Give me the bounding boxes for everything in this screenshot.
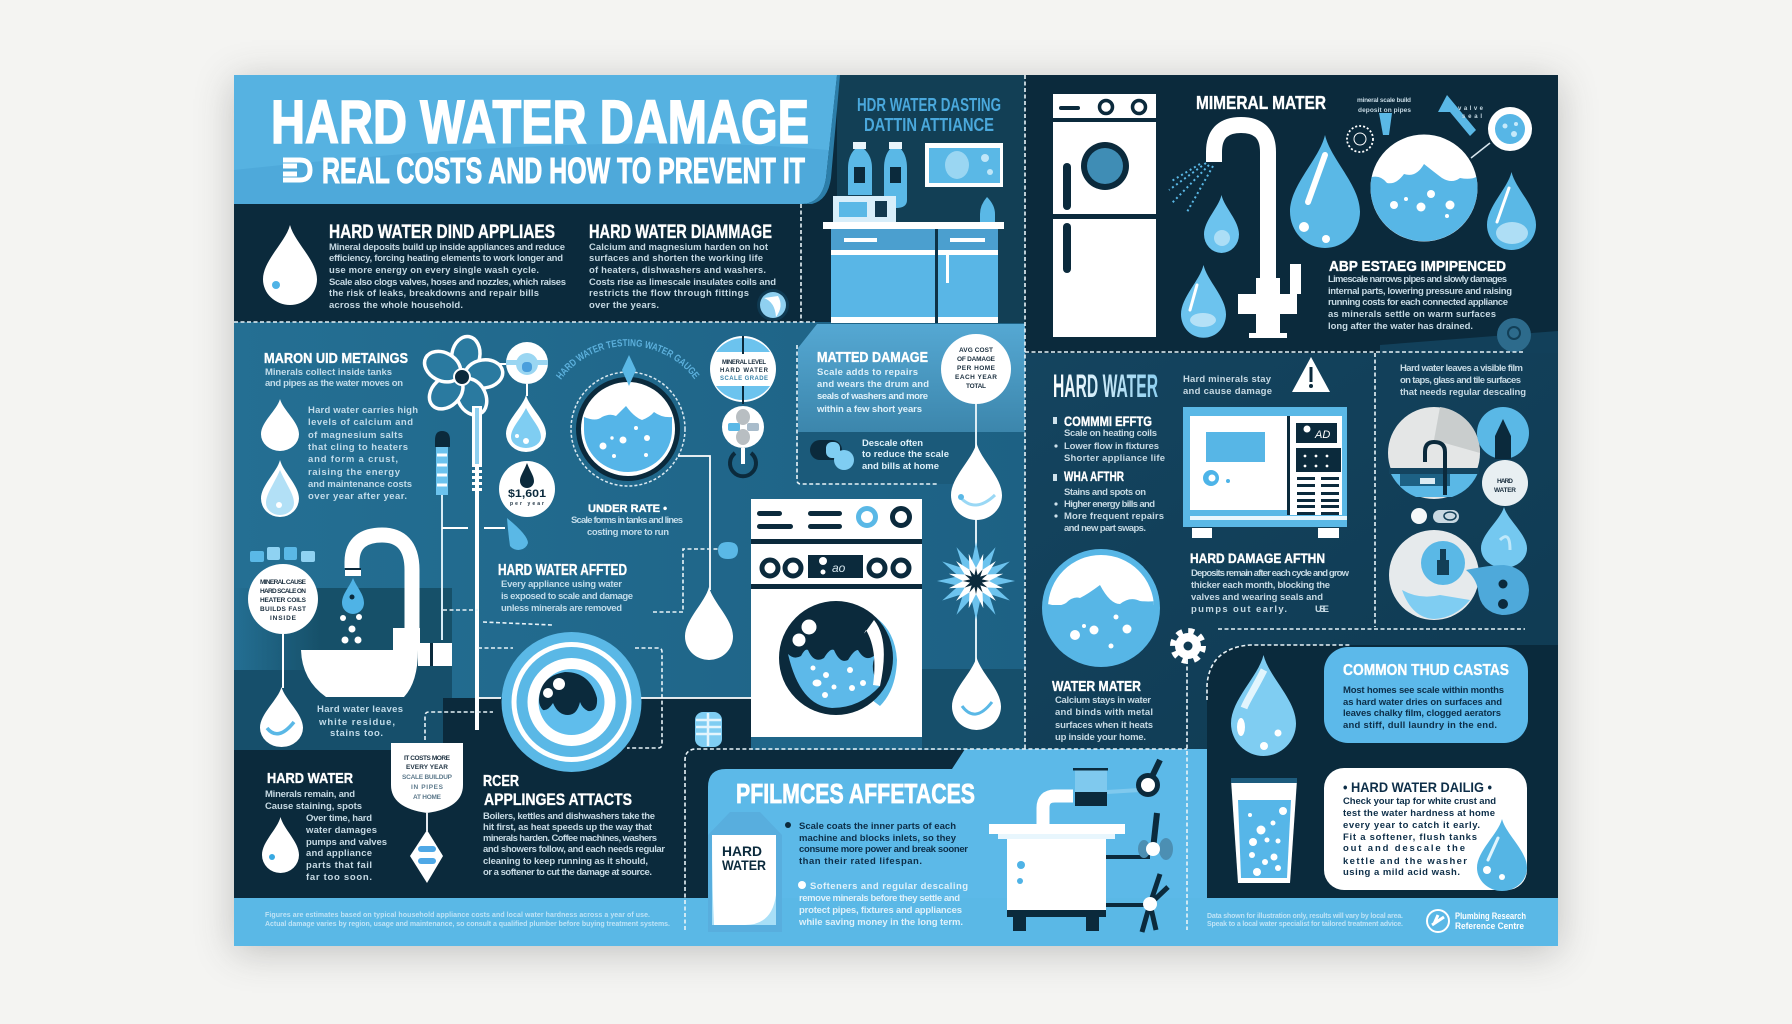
heading: appliances attacks: APPLINGES ATTACTS — [484, 790, 632, 809]
text block: top right notes — [1400, 363, 1526, 398]
text block: lower notes: water damages — [305, 825, 377, 836]
callout: hard water daily — [1324, 768, 1527, 890]
icon: band circle: SCALE GRADE — [720, 376, 768, 382]
icon: tap drop with connector — [653, 456, 738, 660]
panel: sky appliances section — [708, 760, 1173, 932]
icon: shower tool: seal — [1462, 114, 1482, 120]
text block: appliance effects: running costs for each connected appliance — [1328, 297, 1508, 308]
icon: text badge: HARD — [1497, 478, 1513, 485]
text block: appliances attacks: minerals harden. Coffee machines, washers — [483, 833, 657, 844]
icon: big drop — [1290, 135, 1360, 248]
text block: appliance effects: long after the water has drained. — [1328, 321, 1473, 332]
text block: basin note: Hard water leaves — [317, 704, 403, 715]
icon: white text circle: MINERAL CAUSE — [260, 579, 307, 586]
list: common effects: Stains and spots on — [1064, 487, 1146, 498]
icon: white info circle — [941, 334, 1011, 404]
callout: hard water daily: test the water hardness at home — [1343, 808, 1495, 819]
text block: state note — [571, 503, 683, 538]
text block: appliances: use more energy on every single wash cycle. — [329, 265, 539, 276]
icon: text badge: WATER — [1494, 487, 1516, 494]
list: common effects: Higher energy bills and — [1064, 499, 1155, 510]
text block: water: surfaces when it heats — [1055, 720, 1153, 731]
heading: cabinet column: DATTIN ATTIANCE — [864, 115, 994, 135]
text block: pale bullet: while saving money in the long term. — [798, 917, 963, 928]
icon: band circle — [710, 336, 776, 404]
text block: dark bullet: machine and blocks inlets, so they — [799, 833, 957, 844]
text block: appliances attacks: or a softener to cut the damage at source. — [483, 867, 652, 878]
panel: sky appliance section — [708, 749, 1207, 898]
text block: drop notes: Hard water carries high — [308, 405, 418, 416]
text block: damage: Costs rise as limescale insulates coils and — [589, 277, 776, 288]
icon: stacked cubes — [250, 547, 315, 562]
icon: sink faucet — [301, 535, 452, 697]
icon: white text circle: HARD SCALE ON — [260, 588, 306, 595]
icon: warning triangle — [1292, 357, 1330, 392]
text block: basin note: white residue, — [318, 717, 395, 728]
icon: glass of water — [1231, 778, 1297, 883]
text block: appliances: Mineral deposits build up inside appliances and reduce — [329, 242, 565, 253]
icon: water gauge — [571, 355, 685, 486]
panel: cabinet column — [837, 75, 1025, 323]
icon: shimmering drop — [1481, 507, 1527, 568]
icon: small ring circle — [1471, 107, 1532, 158]
icon: white drop pair — [261, 399, 299, 517]
panel: tips column — [1231, 647, 1528, 891]
icon: water circle large — [1042, 549, 1160, 670]
text block: appliances: efficiency, forcing heating elements to work longer and — [329, 253, 563, 264]
heading: appliances: HARD WATER DIND APPLIAES — [329, 222, 555, 243]
text block: basin note — [317, 704, 403, 739]
icon: starburst — [937, 542, 1015, 620]
icon: small blue drop — [507, 518, 528, 550]
text block: water: Calcium stays in water — [1055, 695, 1151, 706]
icon: shield note — [391, 743, 463, 813]
icon: lower drop — [262, 817, 299, 873]
icon: cabinet — [823, 222, 1004, 323]
text block: state note: UNDER RATE • — [588, 503, 667, 515]
text block: appliances attacks: cleaning to keep running as it should, — [483, 856, 648, 867]
icon: stem with drops — [951, 404, 1002, 730]
text block: appliances attacks: hit first, as heat speeds up the way that — [483, 822, 653, 833]
icon: shield note: SCALE BUILDUP — [402, 774, 453, 781]
icon: price circle — [499, 461, 555, 517]
icon: thin probe — [435, 431, 505, 640]
text block: affected: Every appliance using water — [501, 579, 622, 590]
callout: hard water daily: using a mild acid wash. — [1343, 867, 1460, 878]
text block: matted damage: within a few short years — [816, 404, 922, 415]
icon: small bottle — [980, 197, 995, 222]
icon: drop dot — [272, 281, 280, 289]
text block: drop notes: and maintenance costs — [308, 479, 412, 490]
text block: dark bullet: than their rated lifespan. — [799, 856, 922, 867]
callout: hard water daily: Check your tap for white crust and — [1343, 796, 1496, 807]
panel: sink backdrop band — [234, 588, 452, 670]
text block: damage after: valves and wearing seals and — [1191, 592, 1323, 603]
icon: washing machine — [751, 499, 922, 737]
icon: peg and note — [1357, 97, 1411, 135]
panel: bottom left content — [262, 743, 665, 883]
text block: metrics: and pipes as the water moves on — [265, 378, 403, 389]
icon: light drop — [1231, 655, 1296, 756]
text block: appliances attacks: Boilers, kettles and dishwashers take the — [483, 811, 655, 822]
icon: striped capsule — [695, 712, 722, 747]
text block: drop notes: raising the energy — [308, 467, 401, 478]
text block: pale bullet — [798, 881, 968, 928]
list: common effects — [1053, 413, 1165, 534]
icon: dashed seal — [1347, 126, 1373, 152]
text block: damage after: USE — [1315, 604, 1329, 615]
icon: lock circle — [497, 342, 548, 396]
header banner — [234, 75, 840, 204]
icon: picture frame — [925, 143, 1003, 187]
text block: lower intro: Minerals remain, and — [265, 789, 355, 800]
icon: microwave — [833, 196, 896, 223]
text block: footer middle: Data shown for illustration only, results will vary by local area. — [1207, 913, 1403, 920]
text block: drop notes: over year after year. — [308, 491, 407, 502]
text block: matted damage: Scale adds to repairs — [817, 367, 918, 378]
icon: peg and note: deposit on pipes — [1358, 107, 1411, 114]
panel: top right corner shade — [1380, 331, 1558, 353]
text block: damage: restricts the flow through fittings — [589, 288, 749, 299]
icon: spray — [1169, 163, 1213, 212]
callout: common causes: as hard water dries on surfaces and — [1343, 697, 1502, 708]
icon: fan circle — [722, 406, 764, 448]
text block: dark bullet: consume more power and break sooner — [799, 844, 968, 855]
icon: lower drop — [1181, 265, 1226, 338]
icon: faucet — [1214, 125, 1301, 338]
text block: footer middle — [1207, 913, 1403, 928]
heading: appliances attacks — [483, 773, 632, 809]
list: common effects: COMMMI EFFTG — [1064, 413, 1152, 429]
text block: affected — [501, 579, 633, 614]
text block: appliances: the risk of leaks, breakdowns and repair bills — [329, 288, 539, 299]
text block: top right notes: Hard water leaves a visible film — [1400, 363, 1523, 374]
panel: sky footer — [234, 898, 1558, 946]
icon: footer logo — [1427, 910, 1449, 932]
heading: water water: WATER MATER — [1052, 678, 1141, 695]
text block: damage: over the years. — [589, 300, 659, 311]
text block: drop notes: levels of calcium and — [308, 417, 413, 428]
icon: band circle: MINERAL LEVEL — [722, 360, 766, 366]
heading: appliance effects: ABP ESTAEG IMPIPENCED — [1329, 258, 1506, 275]
panel: mineral water top right — [1053, 93, 1536, 352]
panel: kitchen cabinet illustration — [823, 95, 1004, 323]
icon: stem and drop — [260, 634, 303, 747]
icon: shower tool — [1438, 95, 1484, 136]
icon: bottles — [848, 142, 907, 208]
icon: band circle: HARD WATER — [720, 368, 769, 374]
text block: footer left: Figures are estimates based on typical household appliance costs and local water hardness across a year of use. — [265, 912, 650, 919]
list: common effects: and new part swaps. — [1064, 523, 1146, 534]
heading: main metrics: MARON UID METAINGS — [264, 350, 408, 367]
text block: damage after: thicker each month, blocking the — [1191, 580, 1330, 591]
text block: dark bullet — [785, 821, 968, 867]
text block: affected: unless minerals are removed — [501, 603, 622, 614]
icon: small drop — [1204, 195, 1239, 253]
callout: common causes: COMMON THUD CASTAS — [1343, 662, 1509, 679]
text block: footer brand: Plumbing Research — [1455, 911, 1526, 922]
icon: white info circle: TOTAL — [966, 383, 986, 390]
text block: pale bullet: remove minerals before they settle and — [799, 893, 960, 904]
text block: matted damage: and wears the drum and — [817, 379, 929, 390]
text block: metrics — [265, 367, 403, 389]
panel: matted damage card — [798, 324, 1025, 484]
text block: lower notes: far too soon. — [306, 872, 372, 883]
text block: damage after: Deposits remain after each cycle and grow — [1191, 568, 1350, 579]
text block: footer middle: Speak to a local water specialist for tailored treatment advice. — [1207, 921, 1403, 928]
text block: damage — [589, 242, 776, 311]
text block: state note: costing more to run — [587, 527, 669, 538]
heading: hard water lower: HARD WATER — [267, 770, 353, 787]
icon: blue drop — [1477, 819, 1527, 891]
icon: subtitle badge — [283, 160, 310, 180]
icon: peg and note: mineral scale build — [1357, 97, 1411, 104]
text block: damage after: pumps out early. — [1191, 604, 1287, 615]
text block: drop notes: and form a crust, — [308, 454, 398, 465]
text block: lower notes: pumps and valves — [306, 837, 387, 848]
text block: appliances: Scale also clogs valves, hoses and nozzles, which raises — [329, 277, 566, 288]
text block: appliance effects: internal parts, lowering pressure and raising — [1328, 286, 1512, 297]
panel: dark tips panel — [1207, 645, 1558, 898]
text block: lower notes — [305, 813, 387, 883]
callout: common causes: Most homes see scale within months — [1343, 685, 1504, 696]
text block: lower intro: Cause staining, spots — [265, 801, 362, 812]
text block: pill note: and bills at home — [862, 461, 939, 472]
text block: water — [1055, 695, 1153, 743]
text block: metrics: Minerals collect inside tanks — [265, 367, 392, 378]
icon: eye ring — [502, 632, 642, 772]
icon: shower tool: valve — [1458, 106, 1484, 112]
panel: poster background — [234, 75, 1558, 946]
text block: water: up inside your home. — [1055, 732, 1146, 743]
connector lines — [425, 610, 751, 748]
text block: footer left — [265, 912, 670, 928]
text block: pale bullet: protect pipes, fixtures and appliances — [799, 905, 962, 916]
panel: footer content — [265, 910, 1526, 932]
panel: matted damage content — [751, 334, 1015, 737]
icon: pills — [1411, 508, 1459, 524]
panel: lower right section — [1025, 353, 1558, 750]
text block: pill note: Descale often — [862, 438, 923, 449]
text block: drop notes: of magnesium salts — [308, 430, 403, 441]
text block: list intro — [1183, 374, 1272, 397]
icon: text badge — [1482, 460, 1528, 506]
text block: footer brand — [1455, 911, 1526, 932]
icon: gear — [1173, 631, 1203, 661]
icon: water circle — [1370, 134, 1478, 242]
text block: lower intro — [265, 789, 362, 812]
icon: bottom scene circle — [1389, 530, 1479, 620]
panel: lower left band — [234, 670, 452, 750]
text block: appliance effects — [1328, 274, 1512, 332]
icon: microwave oven — [1183, 407, 1347, 538]
icon: white info circle: PER HOME — [957, 365, 996, 372]
connector: card outline — [797, 345, 937, 484]
panel: appliance intro text — [263, 222, 789, 321]
text block: pale bullet: Softeners and regular descaling — [810, 881, 968, 892]
icon: drop under lock — [506, 395, 546, 452]
text block: top right notes: on taps, glass and tile surfaces — [1400, 375, 1521, 386]
icon: shield note: AT HOME — [413, 794, 442, 801]
text block: drop notes — [308, 405, 418, 502]
text block: basin note: stains too. — [330, 728, 383, 739]
text block: damage after — [1191, 568, 1350, 615]
icon: white text circle: BUILDS FAST — [260, 606, 306, 613]
text block: affected: is exposed to scale and damage — [501, 591, 633, 602]
heading: damage after: HARD DAMAGE AFTHN — [1190, 550, 1325, 566]
text block: dark bullet: Scale coats the inner parts of each — [799, 821, 956, 832]
callout: hard water daily: • HARD WATER DAILIG • — [1343, 779, 1492, 795]
icon: washing machine: ao — [832, 561, 846, 575]
text block: appliances attacks — [483, 811, 665, 878]
icon: sink unit with fans — [989, 760, 1173, 932]
icon: faucet scene circle — [1388, 407, 1480, 499]
text block: matted damage: seals of washers and more — [817, 391, 928, 402]
callout: hard water daily: every year to catch it early. — [1343, 820, 1480, 831]
text block: appliance effects: as minerals settle on warm surfaces — [1328, 309, 1496, 320]
icon: white drop — [263, 225, 317, 305]
heading: appliances attacks: RCER — [483, 773, 519, 790]
text block: damage: surfaces and shorten the working life — [589, 253, 763, 264]
callout: common causes: leaves chalky film, clogged aerators — [1343, 708, 1501, 719]
text block: drop notes: that cling to heaters — [308, 442, 408, 453]
icon: price circle: per year — [510, 501, 544, 507]
icon: pill capsule — [810, 440, 854, 470]
text block: pill note: to reduce the scale — [862, 449, 949, 460]
icon: white info circle: OF DAMAGE — [957, 356, 996, 363]
text block: lower notes: and appliance — [306, 848, 372, 859]
text block: damage: Calcium and magnesium harden on hot — [589, 242, 769, 253]
text block: lower notes: parts that fail — [306, 860, 372, 871]
text block: appliances — [329, 242, 566, 311]
panel: central left content — [248, 334, 776, 772]
text block: water: and binds with metal — [1055, 707, 1153, 718]
icon: price circle: $1,601 — [508, 488, 546, 500]
icon: stem with stripes — [472, 406, 482, 730]
icon: shield note: IN PIPES — [411, 784, 444, 791]
list: common effects: WHA AFTHR — [1064, 468, 1124, 484]
text block: list intro: Hard minerals stay — [1183, 374, 1272, 385]
title: HARD WATER DAMAGE — [271, 88, 809, 156]
subtitle: REAL COSTS AND HOW TO PREVENT IT — [322, 150, 805, 191]
heading: damage: HARD WATER DIAMMAGE — [589, 222, 772, 243]
icon: blue speech drop — [1466, 565, 1529, 615]
icon: white info circle: EACH YEAR — [955, 374, 997, 381]
text block: top right notes: that needs regular descaling — [1400, 387, 1526, 398]
text block: pill note — [862, 438, 949, 472]
icon: right drop — [1487, 172, 1536, 250]
panel: central blue section — [234, 322, 1025, 750]
heading: cabinet column: HDR WATER DASTING — [857, 95, 1001, 115]
text block: appliances attacks: and showers follow, and each needs regular — [483, 844, 665, 855]
panel: machine side band — [922, 669, 1025, 749]
icon: white text circle: HEATER COILS — [260, 597, 307, 604]
heading: hard water affected: HARD WATER AFFTED — [498, 562, 627, 579]
list: common effects: More frequent repairs — [1064, 511, 1164, 522]
icon: flower valve — [419, 334, 505, 420]
text block: appliance effects: Limescale narrows pipes and slowly damages — [1328, 274, 1507, 285]
icon: white text circle — [248, 564, 318, 634]
text block: matted damage — [816, 367, 929, 415]
heading: appliances affected: PFILMCES AFFETACES — [736, 778, 975, 809]
text block: state note: Scale forms in tanks and lines — [571, 515, 683, 526]
icon: hard water jug: WATER — [722, 857, 766, 873]
icon: small orb — [757, 289, 789, 321]
callout: hard water daily: out and descale the — [1343, 843, 1465, 854]
icon: plug ring — [730, 448, 756, 476]
callout: hard water daily: Fit a softener, flush tanks — [1343, 832, 1477, 843]
heading: mineral water: MIMERAL MATER — [1196, 93, 1326, 113]
icon: diamond tag — [410, 813, 443, 883]
panel: hard water list — [1042, 357, 1529, 743]
icon: shield note: EVERY YEAR — [406, 764, 448, 771]
text block: footer left: Actual damage varies by region, usage and maintenance, so consult a qualified plumber before buying treatment systems. — [265, 921, 670, 928]
heading: cabinet column — [857, 95, 1001, 135]
text block: appliances: across the whole household. — [329, 300, 463, 311]
icon: faded badge — [1497, 318, 1531, 352]
list: common effects: Lower flow in fixtures — [1064, 441, 1159, 452]
icon: hard water jug: HARD — [722, 843, 762, 859]
icon: shield note: IT COSTS MORE — [404, 755, 451, 762]
callout: hard water daily: kettle and the washer — [1343, 856, 1467, 867]
label: curved gauge text: HARD WATER TESTING WATER GAUGE — [556, 339, 700, 380]
heading: matted damage: MATTED DAMAGE — [817, 349, 928, 366]
callout: common causes — [1324, 647, 1528, 743]
icon: white text circle: INSIDE — [270, 615, 297, 622]
text block: lower notes: Over time, hard — [306, 813, 372, 824]
text block: footer brand: Reference Centre — [1455, 921, 1524, 932]
icon: hard water jug — [708, 812, 782, 932]
text block: list intro: and cause damage — [1183, 386, 1272, 397]
icon: fridge appliance — [1053, 94, 1156, 337]
text block: damage: of heaters, dishwashers and washers. — [589, 265, 766, 276]
panel: hard water list: HARD WATER — [1053, 368, 1158, 404]
panel: lower dark centre — [443, 698, 751, 750]
list: common effects: Scale on heating coils — [1064, 428, 1157, 439]
callout: common causes: and stiff, dull laundry in the end. — [1343, 720, 1497, 731]
icon: microwave oven: AD — [1314, 429, 1330, 441]
icon: tower circle — [1477, 407, 1529, 459]
list: common effects: Shorter appliance life — [1064, 453, 1165, 464]
icon: white info circle: AVG COST — [959, 347, 993, 354]
